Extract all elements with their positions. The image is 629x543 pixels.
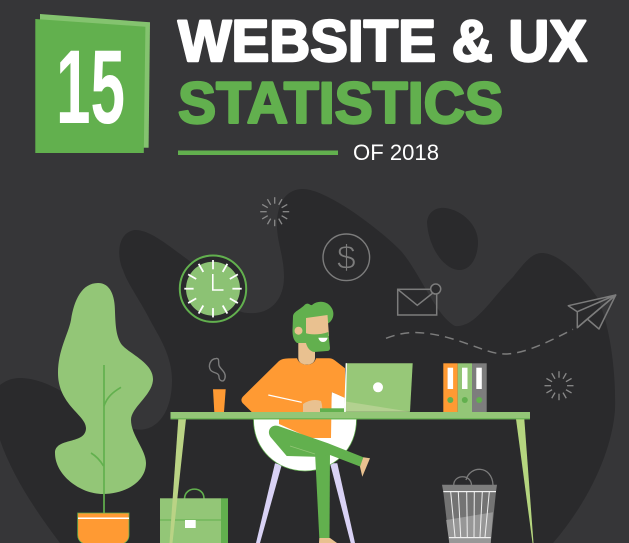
dashed flight path [386,329,573,354]
wastebasket [442,469,497,543]
background blob: large dark shape [0,189,615,543]
face [306,315,329,340]
desk left leg [170,419,186,543]
header badge: 15 [35,14,150,153]
icon: sparkle right [544,371,574,400]
laptop [320,363,413,412]
icon: coffee cup [213,389,226,412]
leg crease [290,446,315,454]
icon: dollar coin [323,234,370,281]
briefcase [160,489,228,543]
title: website and ux: WEBSITE & UX [178,9,587,74]
crossed leg [269,426,363,467]
header badge: 15: 15 [56,29,125,146]
white chair back behind arm [331,392,346,412]
icon: steam [209,358,225,381]
desk top [170,412,530,419]
title: statistics: STATISTICS [178,71,503,136]
neck [298,335,315,365]
binders [443,363,487,412]
icon: envelope [398,284,441,315]
potted plant [55,283,153,543]
subtitle: of 2018: OF 2018 [353,140,439,165]
desk right leg [516,419,534,543]
wall clock [180,256,246,322]
mouth [318,338,328,342]
chair [254,419,356,543]
person [241,302,370,543]
floor foot [319,538,337,543]
beard [306,332,330,352]
standing leg [315,452,330,538]
icon: sparkle top [260,197,289,226]
arm highlight [268,395,302,402]
hand [303,400,322,412]
background blob: small dark shape [427,208,478,270]
ear [294,327,302,335]
subtitle rule [178,150,338,155]
icon: paper plane [568,295,616,329]
hair [292,302,333,343]
icon: dollar coin: $ [337,239,356,277]
raised foot [360,457,370,477]
torso [241,358,345,438]
